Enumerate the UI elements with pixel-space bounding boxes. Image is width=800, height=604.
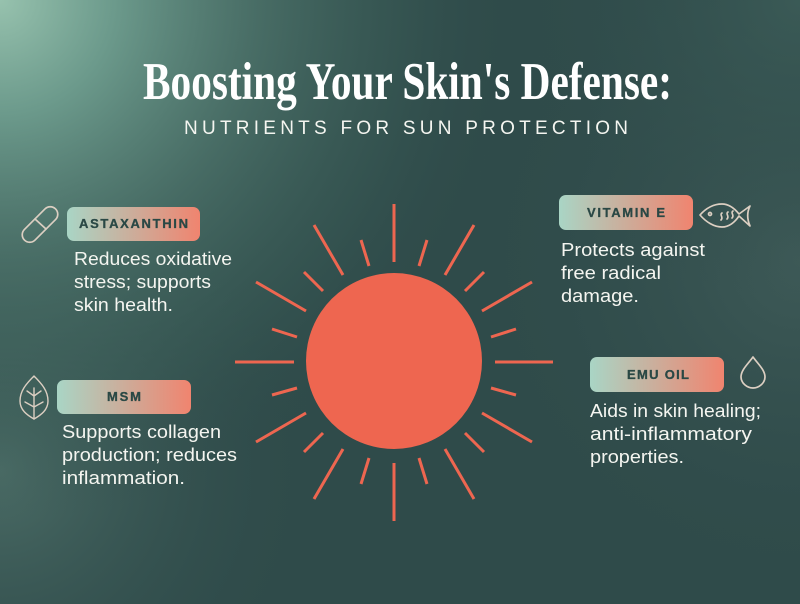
text: msm description: inflammation. — [62, 468, 185, 488]
text: emu oil description: Aids in skin healing; — [590, 401, 761, 421]
icon: leaf — [20, 376, 48, 419]
text: emu oil description: anti-inflammatory — [590, 424, 752, 444]
badge: msm: MSM — [107, 389, 141, 404]
text: msm description: Supports collagen — [62, 422, 221, 442]
panel: emu oil — [590, 357, 765, 467]
badge: astaxanthin — [67, 207, 200, 241]
text: astaxanthin description: stress; supports — [74, 272, 211, 292]
text: astaxanthin description: Reduces oxidative — [74, 249, 232, 269]
subtitle: NUTRIENTS FOR SUN PROTECTION — [184, 118, 628, 139]
text: msm description: production; reduces — [62, 445, 237, 465]
badge: vitamin e: VITAMIN E — [587, 205, 665, 220]
text: vitamin e description: Protects against — [561, 240, 705, 260]
text: vitamin e description: damage. — [561, 286, 639, 306]
badge: emu oil — [590, 357, 724, 392]
badge: astaxanthin: ASTAXANTHIN — [79, 216, 188, 231]
badge: vitamin e — [559, 195, 693, 230]
text: astaxanthin description: skin health. — [74, 295, 173, 315]
icon: drop — [741, 357, 765, 388]
sun rays — [235, 204, 553, 521]
text: vitamin e description: free radical — [561, 263, 661, 283]
icon: fish — [700, 204, 750, 227]
sun disc — [306, 273, 482, 449]
badge: emu oil: EMU OIL — [627, 367, 689, 382]
badge: msm — [57, 380, 191, 414]
text: emu oil description: properties. — [590, 447, 684, 467]
sun with rays — [235, 204, 553, 521]
panel: astaxanthin — [19, 204, 232, 315]
icon: capsule — [19, 204, 61, 245]
panel: vitamin e — [559, 195, 750, 306]
panel: msm — [20, 376, 237, 488]
